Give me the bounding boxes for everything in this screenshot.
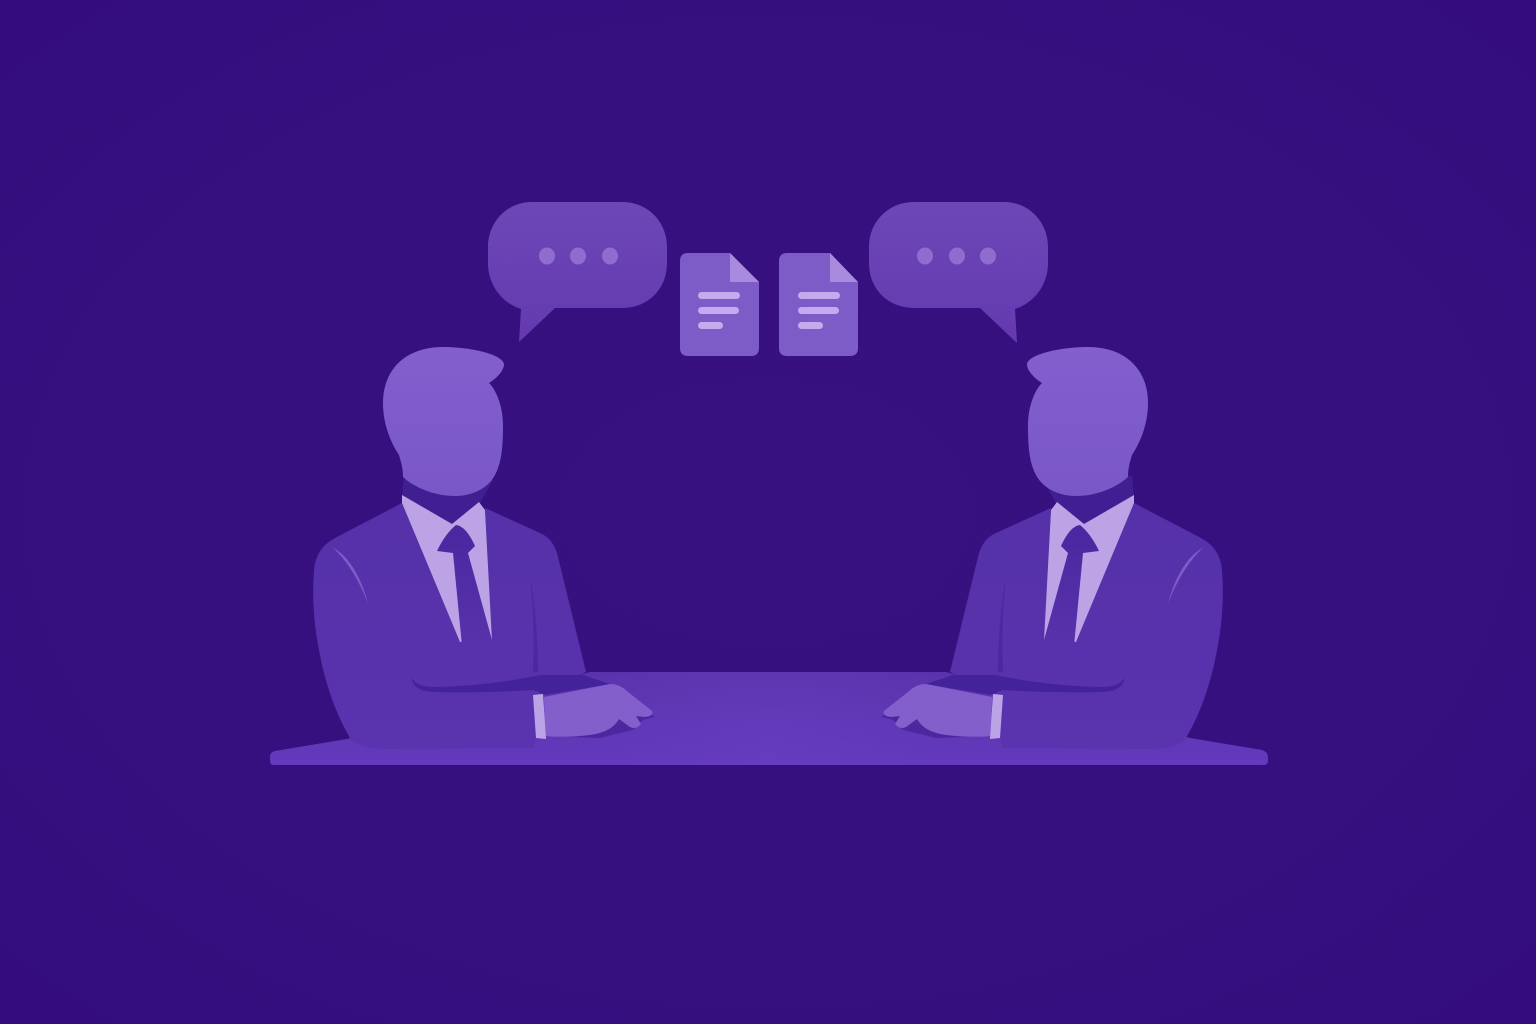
hand — [884, 684, 992, 737]
person left — [313, 347, 655, 749]
table — [270, 672, 1268, 765]
head — [1027, 347, 1148, 496]
person right — [881, 347, 1223, 749]
neck — [402, 476, 493, 526]
cuff — [533, 694, 546, 739]
arm fold shadow — [926, 675, 1124, 695]
sleeve crease — [530, 577, 538, 672]
shirt — [402, 495, 492, 642]
suit body — [950, 503, 1223, 749]
arm fold shadow — [412, 675, 610, 695]
hand shadow — [881, 712, 991, 738]
neck — [1043, 476, 1134, 526]
hand shadow — [545, 712, 655, 738]
shirt — [1044, 495, 1134, 642]
suit body — [313, 503, 586, 749]
typing dots right — [917, 248, 996, 264]
shoulder highlight — [1168, 547, 1204, 603]
tie — [437, 525, 492, 646]
cuff — [990, 694, 1003, 739]
head — [383, 347, 504, 496]
sleeve crease — [998, 577, 1006, 672]
speech bubble left — [488, 202, 667, 342]
document left — [680, 253, 759, 356]
speech bubble right — [869, 202, 1048, 343]
document right — [779, 253, 858, 356]
tie — [1044, 525, 1099, 646]
hand — [544, 684, 652, 737]
typing dots left — [539, 248, 618, 264]
shoulder highlight — [332, 547, 368, 603]
